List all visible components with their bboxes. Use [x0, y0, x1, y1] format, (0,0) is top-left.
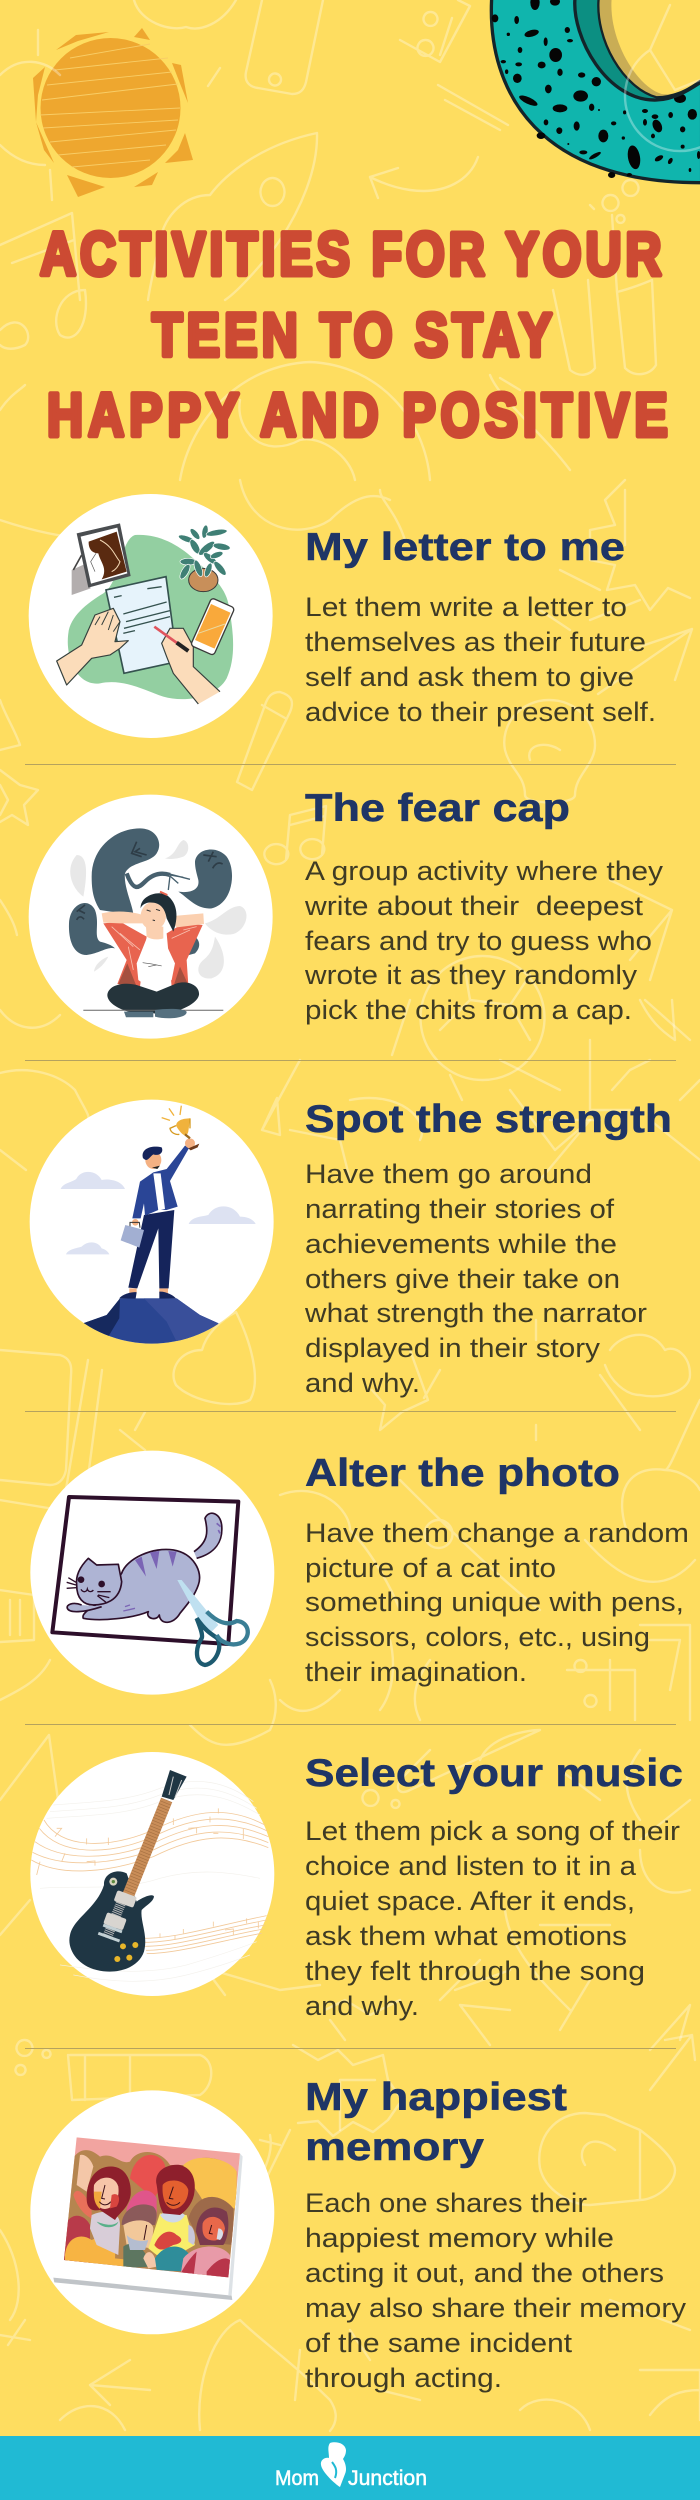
illustration: girl surrounded by ghosts: [29, 795, 273, 1039]
body text: choice and listen to it in a: [305, 1851, 637, 1881]
title: HAPPY AND POSITIVE: [47, 381, 668, 449]
body text: Have them go around: [305, 1159, 592, 1189]
heading: The fear cap: [305, 787, 570, 830]
body text: wrote it as they randomly: [304, 960, 638, 990]
heading: Alter the photo: [305, 1452, 620, 1495]
body text: [304, 856, 664, 1025]
illustration: photo of friends covered in colour: [30, 2090, 274, 2334]
body text: and why.: [305, 1368, 420, 1398]
body text: ask them what emotions: [305, 1921, 627, 1951]
body text: pick the chits from a cap.: [305, 995, 632, 1025]
body text: Let them pick a song of their: [305, 1816, 680, 1846]
body text: they felt through the song: [305, 1956, 645, 1986]
panel: the fear cap: [29, 787, 664, 1039]
heading: My letter to me: [305, 526, 625, 569]
body text: through acting.: [305, 2363, 502, 2393]
heading: memory: [305, 2126, 484, 2169]
body text: what strength the narrator: [304, 1298, 647, 1328]
body text: [305, 1816, 680, 2021]
panel: select your music: [30, 1752, 683, 2021]
body text: something unique with pens,: [305, 1587, 684, 1617]
panel: spot the strength: [30, 1098, 672, 1398]
body text: Let them write a letter to: [305, 592, 627, 622]
body text: narrating their stories of: [305, 1194, 615, 1224]
body text: [305, 1518, 689, 1687]
title: ACTIVITIES FOR YOUR: [40, 220, 662, 288]
heading: Spot the strength: [305, 1098, 672, 1141]
body text: displayed in their story: [305, 1333, 601, 1363]
body text: Have them change a random: [305, 1518, 689, 1548]
body text: A group activity where they: [305, 856, 664, 886]
body text: achievements while the: [305, 1229, 617, 1259]
logo: MomJunction: Mom: [275, 2467, 319, 2490]
footer band: [0, 2436, 700, 2500]
body text: Each one shares their: [305, 2188, 587, 2218]
body text: and why.: [305, 1991, 419, 2021]
heading: [305, 2076, 567, 2169]
body text: their imagination.: [305, 1657, 527, 1687]
body text: may also share their memory: [305, 2293, 687, 2323]
body text: acting it out, and the others: [305, 2258, 664, 2288]
body text: quiet space. After it ends,: [305, 1886, 635, 1916]
heading: Select your music: [305, 1752, 683, 1795]
body text: [305, 592, 656, 727]
panel: my letter to me: [29, 494, 656, 738]
body text: advice to their present self.: [305, 697, 656, 727]
body text: self and ask them to give: [305, 662, 634, 692]
body text: of the same incident: [305, 2328, 573, 2358]
body text: scissors, colors, etc., using: [305, 1622, 650, 1652]
logo: MomJunction: [275, 2442, 427, 2490]
body text: fears and try to guess who: [305, 926, 652, 956]
illustration: electric guitar and music staff: [30, 1752, 274, 1996]
title: TEEN TO STAY: [152, 301, 552, 369]
icon: teal speckled donut: [491, 0, 700, 183]
body text: themselves as their future: [305, 627, 646, 657]
panel: alter the photo: [30, 1451, 689, 1695]
body text: others give their take on: [305, 1264, 620, 1294]
body text: [305, 2188, 687, 2393]
icon: orange sun: [33, 28, 193, 197]
logo: MomJunction: Junction: [348, 2467, 427, 2490]
illustration: man holding a trophy on a mountain: [30, 1100, 274, 1355]
body text: happiest memory while: [305, 2223, 614, 2253]
illustration: writing a letter: [29, 494, 273, 738]
title: [40, 220, 668, 449]
panel: my happiest memory: [30, 2076, 687, 2393]
illustration: cat picture and scissors: [30, 1451, 274, 1695]
body text: picture of a cat into: [305, 1553, 556, 1583]
body text: [304, 1159, 647, 1398]
body text: write about their deepest: [304, 891, 644, 921]
heading: My happiest: [305, 2076, 567, 2119]
